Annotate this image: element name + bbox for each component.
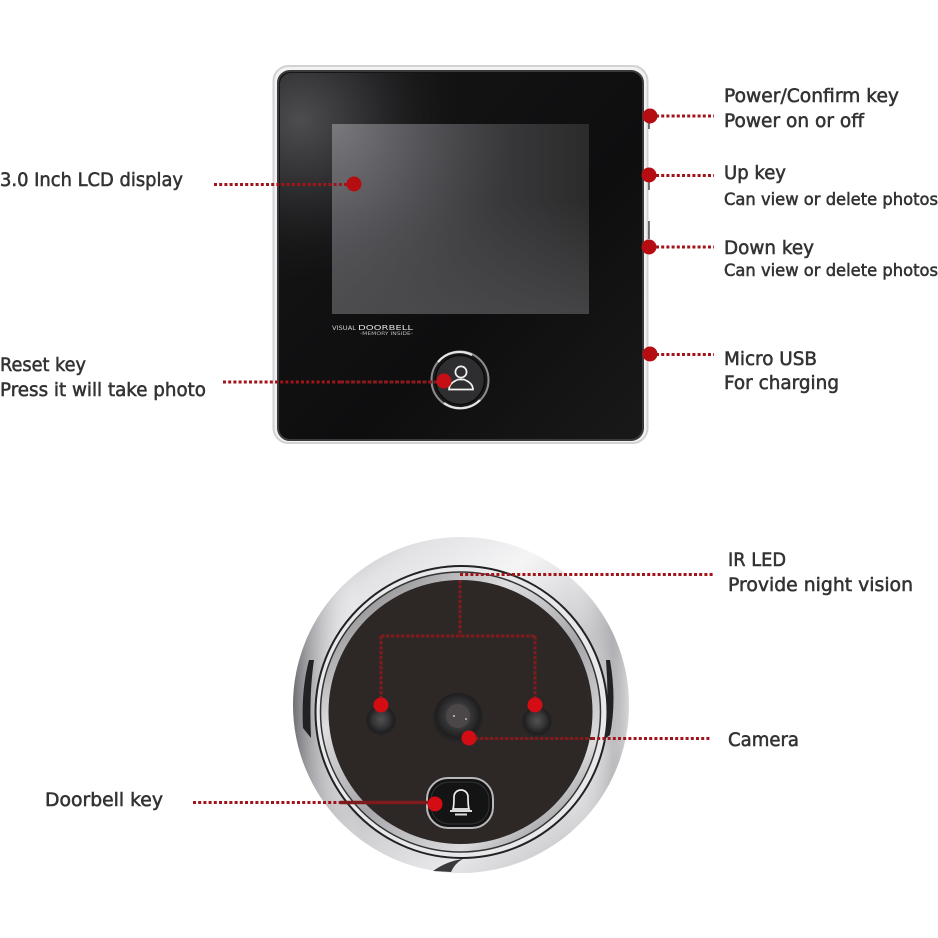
face glare [280, 73, 641, 438]
right IR LED [522, 707, 552, 737]
brand mark: DOORBELL [358, 324, 413, 332]
label: reset key: Press it will take photo [0, 379, 206, 401]
label: up key: Up key [724, 162, 786, 184]
down key callout [642, 240, 714, 254]
callout lines and dots: lens view [193, 574, 713, 812]
reset key button [432, 352, 488, 408]
power key callout [642, 108, 714, 124]
camera callout [462, 730, 710, 746]
label: reset key: Reset key [0, 354, 86, 376]
panel: device lens view [293, 537, 629, 873]
chrome bezel ring [316, 566, 608, 858]
label: IR LED: IR LED [728, 549, 786, 571]
label: reset key [0, 354, 206, 401]
camera lens [433, 693, 483, 743]
label: power key: Power/Confirm key [724, 85, 899, 107]
label: up key [724, 162, 938, 210]
micro USB callout [642, 346, 714, 362]
brand mark [332, 324, 414, 336]
label: LCD display: 3.0 Inch LCD display [0, 169, 183, 191]
inner silver ring [320, 572, 600, 852]
brand mark: VISUAL [332, 325, 357, 332]
brand mark: -MEMORY INSIDE- [360, 331, 414, 336]
label: micro USB [724, 348, 839, 394]
label: micro USB: For charging [724, 372, 839, 394]
housing side shadows [303, 660, 614, 738]
panel: device front view [274, 66, 649, 443]
label: doorbell key: Doorbell key [45, 789, 163, 811]
side key slots [648, 121, 650, 239]
doorbell key [427, 778, 493, 828]
label: power key [724, 85, 899, 132]
housing side shading [293, 537, 629, 873]
LCD callout [214, 176, 362, 192]
LCD screen [332, 124, 589, 314]
IR LED callout [374, 574, 713, 712]
device black front face [278, 71, 643, 440]
reset key callout [223, 374, 452, 388]
label: power key: Power on or off [724, 110, 865, 132]
callout lines and dots: front view [214, 108, 714, 388]
outer chrome housing [293, 537, 629, 873]
doorbell callout [193, 796, 442, 812]
label: camera: Camera [728, 729, 799, 751]
label: IR LED [728, 549, 913, 596]
dark lens face [328, 580, 592, 844]
label: down key [724, 237, 938, 281]
label: down key: Down key [724, 237, 814, 259]
device body frame [274, 66, 648, 443]
left IR LED [366, 706, 396, 736]
up key callout [642, 168, 714, 182]
label: IR LED: Provide night vision [728, 574, 913, 596]
housing bottom notch [433, 859, 463, 872]
label: micro USB: Micro USB [724, 348, 817, 370]
